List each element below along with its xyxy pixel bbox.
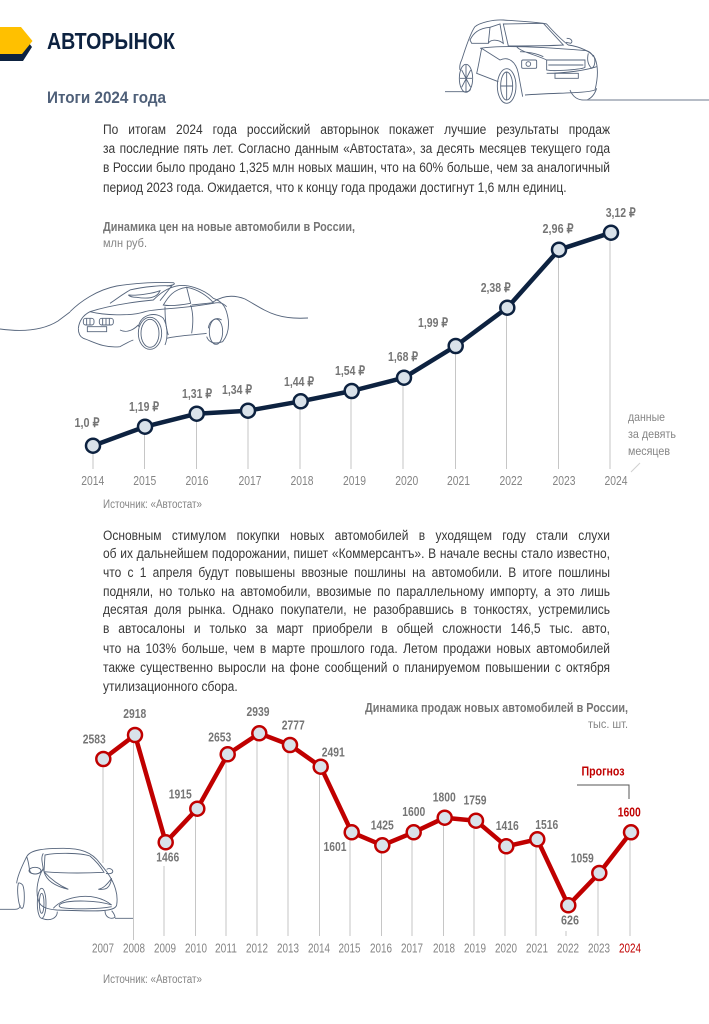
line chart: price dynamics <box>74 205 636 488</box>
year axis: 2021 <box>447 473 470 488</box>
year axis: 2020 <box>495 940 517 956</box>
year axis: 2011 <box>215 940 237 956</box>
text block: stimulus: также существенно выросли на фоне сообщений о планируемом повышении с октября <box>103 660 610 674</box>
chart title: prices: млн руб. <box>103 236 147 250</box>
data line <box>103 733 631 905</box>
text block: stimulus: десятая доля рынка. Однако покупатели, не разобравшись в тонкостях, устремились <box>103 602 610 617</box>
year axis: 2023 <box>588 940 610 956</box>
value labels: 1,99 ₽ <box>418 315 449 330</box>
text block: stimulus: подняли, но только на автомобили, ввозимые по параллельному импорту, а это лишь <box>103 584 610 598</box>
text block: stimulus: в автосалоны и только за март приобрели в общей сложности 146,5 тыс. авто, <box>103 621 610 636</box>
text block: intro: за последние пять лет. Согласно данным «Автостата», за десять месяцев текущего года <box>103 140 610 156</box>
value labels: 1516 <box>535 817 558 832</box>
year axis: 2014 <box>308 940 330 956</box>
icon: line-art hatchback <box>0 848 134 920</box>
value labels: 2653 <box>208 730 231 744</box>
value labels: 1,0 ₽ <box>74 415 100 430</box>
year axis: 2020 <box>395 473 418 488</box>
title: АВТОРЫНОК <box>47 28 176 54</box>
year axis: 2010 <box>185 940 207 956</box>
source: Источник: «Автостат» <box>103 499 202 511</box>
year axis <box>92 940 641 956</box>
note: nine months data: за девять <box>628 427 676 441</box>
year axis: 2009 <box>154 940 176 956</box>
icon: line-art sedan <box>0 282 308 349</box>
year axis: 2016 <box>186 473 208 488</box>
value labels: 2583 <box>83 732 106 746</box>
year axis: 2019 <box>343 473 366 488</box>
value labels: 1600 <box>402 804 425 819</box>
drop lines <box>103 733 630 940</box>
data markers <box>96 726 638 912</box>
year axis: 2018 <box>433 940 455 956</box>
year axis: 2022 <box>500 473 522 488</box>
year axis: 2022 <box>557 940 579 956</box>
data line <box>93 233 611 446</box>
year axis: 2013 <box>277 940 299 956</box>
year axis: 2016 <box>370 940 392 956</box>
note: nine months data: данные <box>628 410 665 424</box>
icon: logo chevron <box>0 27 32 61</box>
year axis: 2017 <box>238 473 262 488</box>
text block: intro: в России было продано 1,325 млн новых машин, что на 60% больше, чем за аналогичный <box>103 160 610 174</box>
text block: stimulus: об их дальнейшем подорожании, пишет «Коммерсантъ». В начале весны стало известно, <box>103 546 610 561</box>
value labels: 1759 <box>464 792 486 808</box>
year axis: 2024 <box>619 940 641 956</box>
subtitle: Итоги 2024 года <box>47 88 166 107</box>
chart title: prices <box>103 219 355 250</box>
text block: intro: период 2023 года. Ожидается, что к концу года продажи достигнут 1,6 млн единиц. <box>103 180 567 194</box>
value labels: 1,31 ₽ <box>182 386 213 401</box>
year axis: 2012 <box>246 940 268 956</box>
value labels: 1425 <box>371 818 394 832</box>
year axis: 2018 <box>290 473 314 488</box>
text block: stimulus <box>103 528 610 694</box>
year axis: 2023 <box>552 473 576 488</box>
value labels: 1416 <box>496 818 519 833</box>
text block: stimulus: утилизационного сбора. <box>103 678 238 694</box>
icon: line-art SUV <box>445 20 597 103</box>
text block: intro <box>103 122 610 195</box>
note: nine months data <box>628 410 676 472</box>
source: Источник: «Автостат» <box>103 974 202 986</box>
line chart: sales dynamics <box>83 704 641 956</box>
value labels <box>74 205 636 430</box>
value labels: 2777 <box>282 718 305 732</box>
value labels: 1059 <box>571 850 594 866</box>
forecast callout <box>577 764 629 799</box>
value labels: 1,44 ₽ <box>284 374 315 389</box>
value labels: 2491 <box>322 744 345 760</box>
value labels: 1,68 ₽ <box>388 349 419 364</box>
year axis: 2019 <box>464 940 486 956</box>
drop lines <box>93 233 610 469</box>
value labels: 2,96 ₽ <box>542 221 574 236</box>
value labels: 1466 <box>156 850 179 864</box>
text block: stimulus: что на 103% больше, чем в марте прошлого года. Летом продажи новых автомобилей <box>103 640 610 656</box>
text block: intro: По итогам 2024 года российский авторынок покажет лучшие результаты продаж <box>103 122 610 136</box>
value labels: 2939 <box>246 704 270 719</box>
value labels: 626 <box>561 912 579 928</box>
year axis: 2015 <box>338 940 360 956</box>
year axis: 2014 <box>81 473 104 488</box>
text block: stimulus: что с 1 апреля будут повышены ввозные пошлины на автомобили. В итоге пошлины <box>103 564 610 580</box>
value labels: 1,19 ₽ <box>129 399 160 414</box>
value labels: 1915 <box>169 786 192 802</box>
year axis: 2017 <box>401 940 423 956</box>
value labels: 2918 <box>123 706 146 721</box>
chart title: sales: Динамика продаж новых автомобилей в России, <box>365 700 628 715</box>
value labels: 2,38 ₽ <box>481 280 511 295</box>
value labels: 1800 <box>433 790 456 804</box>
value labels: 1,54 ₽ <box>335 363 366 378</box>
chart title: prices: Динамика цен на новые автомобили в России, <box>103 219 355 234</box>
note: nine months data: месяцев <box>628 444 670 458</box>
value labels: 1601 <box>324 839 346 854</box>
value labels: 1,34 ₽ <box>222 382 253 397</box>
year axis: 2015 <box>133 473 156 488</box>
year axis: 2007 <box>92 940 114 956</box>
data markers <box>86 226 618 453</box>
value labels: 1600 <box>618 804 641 820</box>
ground line <box>583 99 709 101</box>
value labels <box>83 704 641 928</box>
chart title: sales: тыс. шт. <box>588 717 628 731</box>
value labels: 3,12 ₽ <box>606 205 636 220</box>
year axis <box>81 473 627 488</box>
year axis: 2021 <box>526 940 548 956</box>
year axis: 2008 <box>123 940 145 956</box>
text block: stimulus: Основным стимулом покупки новых автомобилей в уходящем году стали слухи <box>103 528 610 542</box>
year axis: 2024 <box>604 473 628 488</box>
chart title: sales <box>365 700 628 731</box>
forecast callout: Прогноз <box>582 764 625 778</box>
